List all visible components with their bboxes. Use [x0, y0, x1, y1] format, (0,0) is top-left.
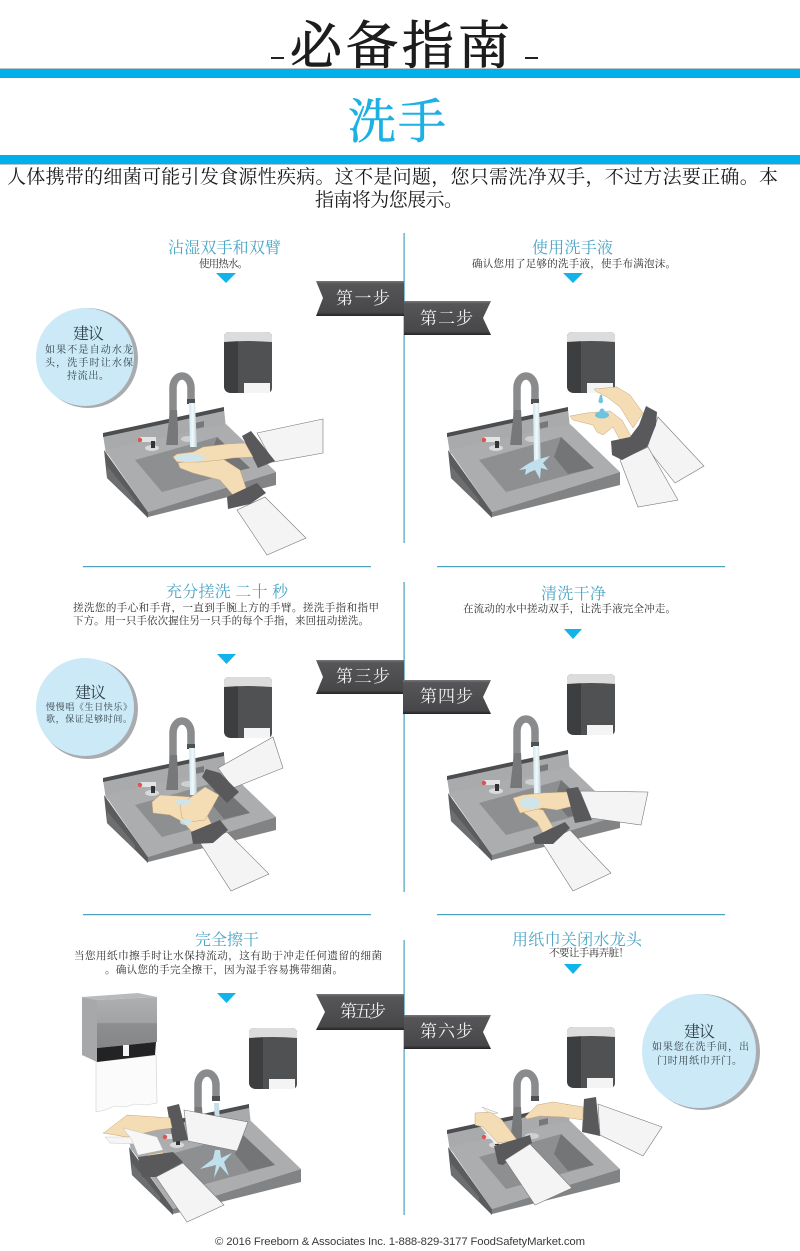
icon: sink with hands closing tap [447, 1073, 662, 1215]
icon: soap dispenser [224, 677, 272, 738]
icon: sink with hands drying [103, 1073, 301, 1222]
divider lines [83, 233, 725, 1215]
tip: step 1: 持流出。 [67, 369, 109, 382]
subtitle: 洗手 [348, 96, 446, 149]
banner: step 4: 第四步 [420, 687, 473, 706]
icon: soap dispenser [567, 1027, 615, 1088]
tip: step 1: 建议 [73, 325, 104, 343]
icon: soap dispenser [567, 332, 615, 393]
text: step 6: 不要让手再弄脏！ [549, 946, 629, 959]
banner: step 6: 第六步 [420, 1022, 473, 1041]
panel: step 1 [36, 239, 404, 555]
arrow: step 5 [217, 993, 236, 1003]
text: step 5 [74, 949, 382, 976]
icon: soap dispenser [567, 674, 615, 735]
text: step 5: 。确认您的手完全擦干，因为湿手容易携带细菌。 [105, 963, 343, 976]
arrow: step 6 [564, 964, 582, 974]
intro text: 指南将为您展示。 [315, 189, 463, 211]
icon: soap dispenser [224, 332, 272, 393]
banner: step 1 [316, 281, 404, 316]
tip: step 1 [36, 308, 138, 408]
tip: step 6 [642, 994, 760, 1110]
text: step 1: 使用热水。 [199, 257, 248, 270]
text: step 4: 在流动的水中搓动双手，让洗手液完全冲走。 [463, 602, 676, 615]
tip: step 6: 建议 [684, 1023, 715, 1041]
tip: step 1: 如果不是自动水龙 [45, 343, 133, 356]
tip: step 3: 建议 [75, 684, 106, 702]
panel: step 3 [36, 583, 404, 891]
header bar top [0, 68, 800, 78]
heading: step 3: 充分搓洗 二十 秒 [166, 583, 289, 601]
arrow: step 3 [217, 654, 236, 664]
text: step 2: 确认您用了足够的洗手液，使手布满泡沫。 [472, 257, 676, 270]
tip: step 1: 头，洗手时让水保 [45, 356, 133, 369]
intro text [7, 166, 778, 211]
tip: step 3 [36, 658, 138, 759]
text: step 3: 下方。用一只手依次握住另一只手的每个手指，来回扭动搓洗。 [73, 614, 369, 627]
tip: step 6: 如果您在洗手间，出 [652, 1040, 749, 1053]
panel: step 6 [404, 931, 760, 1215]
heading: step 2: 使用洗手液 [532, 239, 613, 257]
banner: step 2 [404, 301, 491, 335]
header bar bottom [0, 155, 800, 165]
text: step 3 [73, 601, 379, 627]
banner: step 5 [316, 994, 404, 1030]
intro text: 人体携带的细菌可能引发食源性疾病。这不是问题，您只需洗净双手，不过方法要正确。本 [7, 166, 778, 188]
arrow: step 2 [563, 273, 583, 283]
panel: step 4 [403, 585, 676, 891]
heading: step 1: 沾湿双手和双臂 [168, 239, 281, 257]
icon: sink with hands rinsing [447, 719, 648, 891]
icon: sink with hands and soap [447, 376, 704, 518]
arrow: step 1 [216, 273, 236, 283]
arrow: step 4 [564, 629, 582, 639]
tip: step 3: 歌，保证足够时间。 [46, 713, 132, 725]
tip: step 3: 慢慢唱《生日快乐》 [46, 701, 132, 712]
panel: step 2 [404, 239, 704, 518]
title: 必备指南 [290, 19, 510, 76]
text: step 3: 搓洗您的手心和手背，一直到手腕上方的手臂。搓洗手指和指甲 [73, 601, 379, 614]
heading: step 4: 清洗干净 [541, 585, 606, 603]
tip: step 6: 门时用纸巾开门。 [657, 1054, 742, 1067]
icon: towel dispenser [82, 993, 157, 1112]
banner: step 6 [404, 1015, 491, 1049]
banner: step 3: 第三步 [336, 667, 390, 686]
icon: soap dispenser [249, 1028, 297, 1089]
banner: step 3 [316, 660, 404, 694]
footer: © 2016 Freeborn & Associates Inc. 1-888-829-3177 FoodSafetyMarket.com [215, 1236, 585, 1248]
banner: step 5: 第五步 [340, 1002, 386, 1021]
heading: step 5: 完全擦干 [195, 931, 259, 949]
banner: step 1: 第一步 [336, 289, 390, 308]
icon: sink with water and hands [103, 376, 323, 555]
banner: step 4 [403, 680, 491, 714]
banner: step 2: 第二步 [420, 309, 473, 328]
text: step 5: 当您用纸巾擦手时让水保持流动，这有助于冲走任何遗留的细菌 [74, 949, 382, 962]
panel: step 5 [74, 931, 404, 1222]
heading: step 6: 用纸巾关闭水龙头 [512, 931, 643, 949]
icon: sink with hands scrubbing [103, 721, 283, 891]
